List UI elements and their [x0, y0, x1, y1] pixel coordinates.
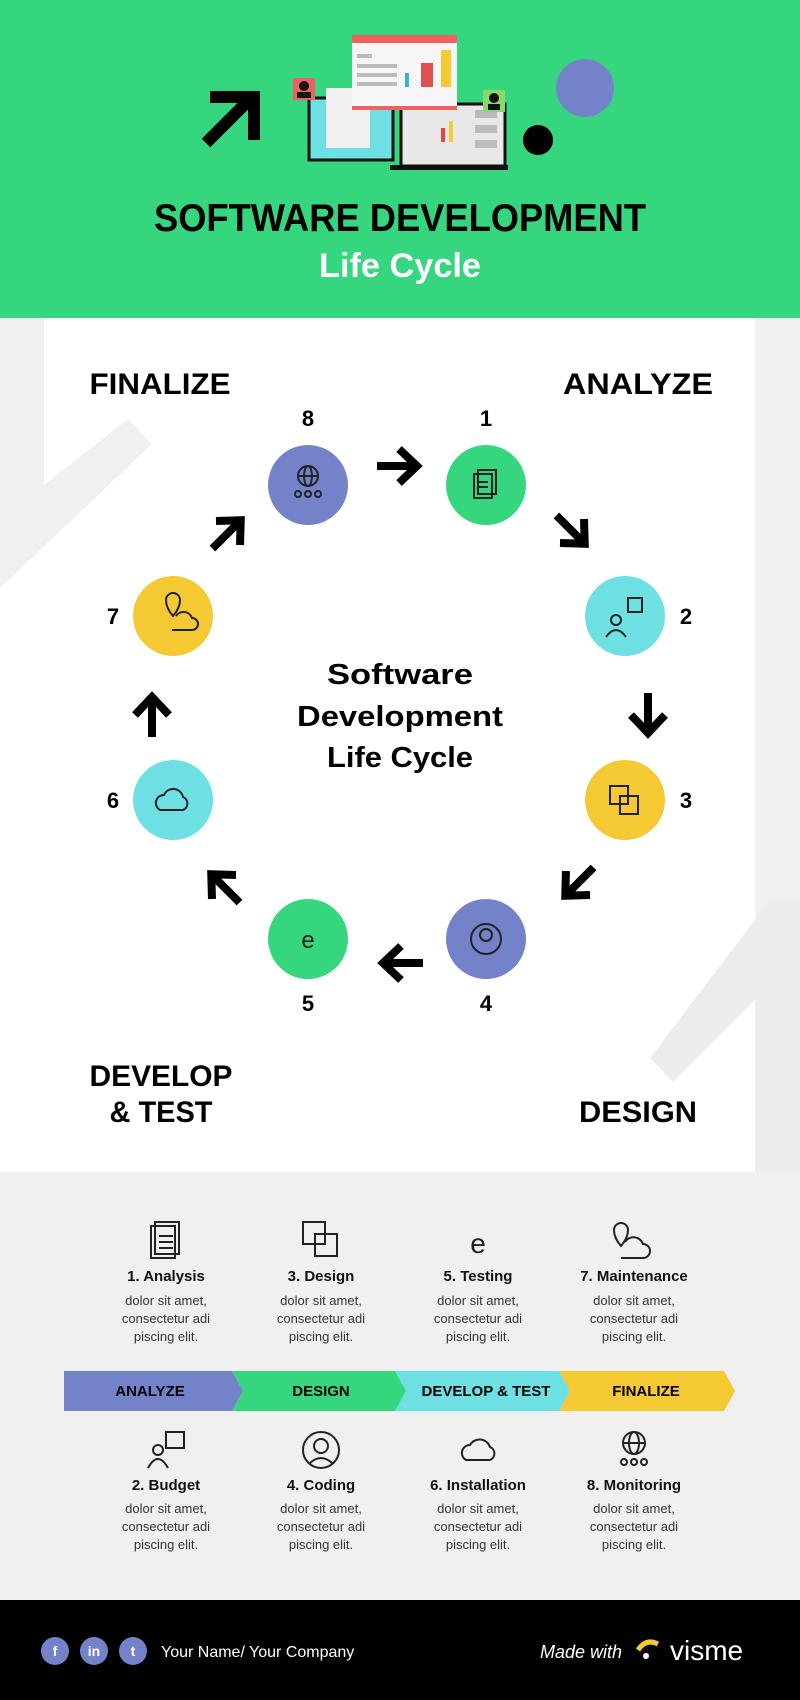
step texts: [122, 1268, 688, 1552]
step texts: dolor sit amet,: [125, 1501, 207, 1516]
step texts: dolor sit amet,: [280, 1501, 362, 1516]
social icons: [41, 1637, 147, 1665]
step texts: piscing elit.: [446, 1329, 510, 1344]
step texts: piscing elit.: [602, 1329, 666, 1344]
company text: Your Name/ Your Company: [161, 1644, 354, 1661]
phase banner: DESIGN: [292, 1383, 350, 1400]
step texts: consectetur adi: [122, 1311, 210, 1326]
phase banner: FINALIZE: [612, 1383, 680, 1400]
made with visme: visme: [670, 1635, 743, 1666]
step texts: 5. Testing: [444, 1268, 512, 1285]
social icons: t: [131, 1643, 136, 1659]
corner labels: [90, 368, 713, 1129]
title: SOFTWARE DEVELOPMENT: [154, 197, 646, 240]
step numbers: 5: [302, 991, 314, 1016]
step texts: consectetur adi: [122, 1519, 210, 1534]
step texts: piscing elit.: [134, 1537, 198, 1552]
phase banner: DEVELOP & TEST: [422, 1383, 550, 1400]
social icons: f: [53, 1643, 58, 1659]
step texts: 1. Analysis: [127, 1268, 205, 1285]
step texts: 7. Maintenance: [580, 1268, 688, 1285]
step texts: dolor sit amet,: [437, 1501, 519, 1516]
cycle panel: [0, 318, 800, 1172]
step texts: 4. Coding: [287, 1477, 355, 1494]
header arrow: [206, 97, 254, 143]
step numbers: 7: [107, 604, 119, 629]
footer: [0, 1600, 800, 1700]
step numbers: 1: [480, 406, 492, 431]
step texts: dolor sit amet,: [125, 1293, 207, 1308]
step numbers: 2: [680, 604, 692, 629]
step texts: dolor sit amet,: [437, 1293, 519, 1308]
social icons: in: [88, 1643, 100, 1659]
step texts: consectetur adi: [277, 1519, 365, 1534]
step texts: dolor sit amet,: [593, 1293, 675, 1308]
step texts: dolor sit amet,: [593, 1501, 675, 1516]
icon glyphs: [298, 466, 318, 486]
made with visme: [540, 1635, 743, 1666]
step numbers: 4: [480, 991, 493, 1016]
phase banner: [64, 1371, 735, 1411]
step texts: consectetur adi: [590, 1519, 678, 1534]
step numbers: 6: [107, 788, 119, 813]
step texts: 2. Budget: [132, 1477, 200, 1494]
steps panel: [0, 1172, 800, 1600]
step texts: 8. Monitoring: [587, 1477, 681, 1494]
step numbers: [107, 406, 692, 1016]
step circles: e: [301, 927, 315, 954]
step texts: consectetur adi: [277, 1311, 365, 1326]
corner labels: FINALIZE: [90, 368, 230, 401]
step texts: dolor sit amet,: [280, 1293, 362, 1308]
step texts: piscing elit.: [602, 1537, 666, 1552]
step texts: 6. Installation: [430, 1477, 526, 1494]
top icons: [151, 1222, 650, 1259]
step texts: piscing elit.: [289, 1537, 353, 1552]
center title: [297, 659, 503, 774]
step texts: piscing elit.: [289, 1329, 353, 1344]
center title: Software: [327, 659, 473, 691]
top icons: e: [470, 1228, 486, 1259]
step texts: consectetur adi: [434, 1519, 522, 1534]
step numbers: 8: [302, 406, 314, 431]
decorative circles: [556, 59, 614, 117]
step texts: 3. Design: [288, 1268, 354, 1285]
phase banner: ANALYZE: [115, 1383, 185, 1400]
step texts: consectetur adi: [590, 1311, 678, 1326]
step circles: [133, 445, 665, 979]
header illustration: [293, 35, 508, 170]
step texts: consectetur adi: [434, 1311, 522, 1326]
header: [0, 0, 800, 318]
step texts: piscing elit.: [134, 1329, 198, 1344]
corner labels: DEVELOP: [90, 1060, 232, 1093]
corner labels: DESIGN: [579, 1096, 697, 1129]
made with visme: Made with: [540, 1642, 622, 1662]
corner labels: & TEST: [110, 1096, 212, 1129]
step numbers: 3: [680, 788, 692, 813]
step texts: piscing elit.: [446, 1537, 510, 1552]
subtitle: Life Cycle: [319, 247, 481, 285]
center title: Life Cycle: [327, 742, 473, 774]
cycle arrows: [135, 449, 665, 980]
bottom icons: [148, 1432, 647, 1468]
corner labels: ANALYZE: [563, 368, 713, 401]
center title: Development: [297, 701, 503, 733]
